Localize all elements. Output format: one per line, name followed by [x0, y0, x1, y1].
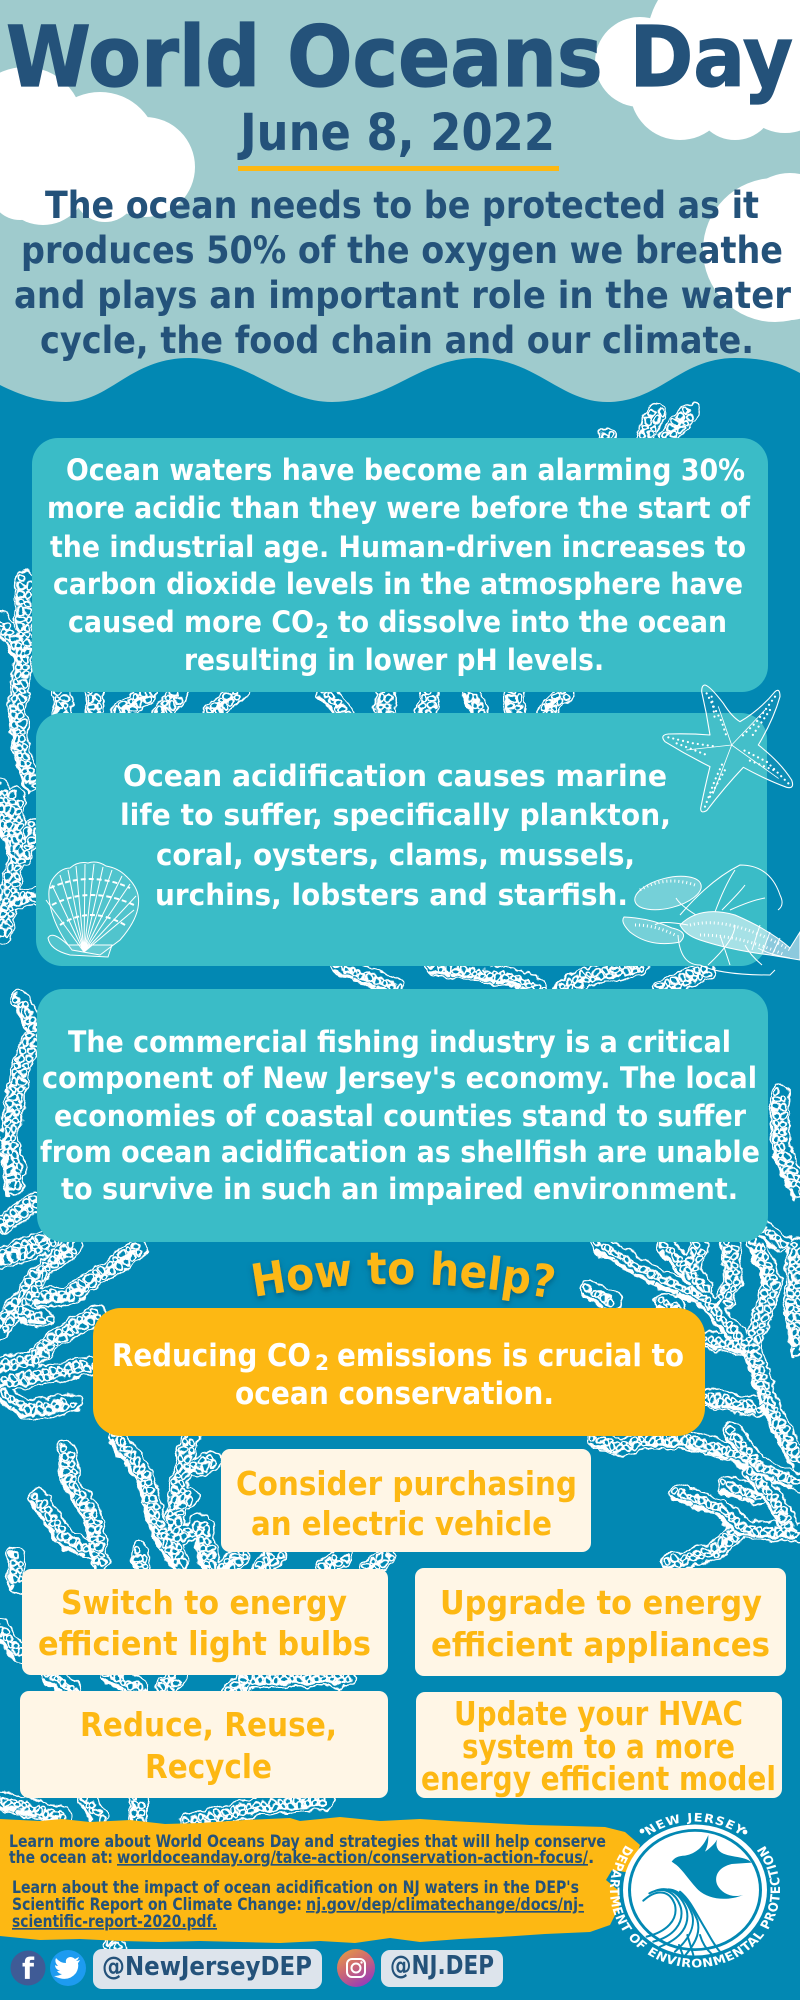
footer text	[9, 1832, 606, 1931]
card: light bulbs	[22, 1569, 388, 1675]
logo: NJ DEP seal: DEPARTMENT OF ENVIRONMENTAL PROTECTION	[610, 1846, 780, 1968]
card: reduce reuse recycle: Reduce, Reuse,	[80, 1705, 337, 1744]
panel: fishing economy	[37, 989, 768, 1242]
social handle: NJ.DEP: @NJ.DEP	[390, 1951, 494, 1981]
heading: how to help: How to help?	[250, 1250, 556, 1306]
footer text: scientific-report-2020.pdf.	[12, 1912, 217, 1931]
panel: marine life: Ocean acidification causes marine	[123, 759, 667, 793]
panel: marine life: life to suffer, specifically plankton,	[120, 798, 671, 832]
card: HVAC: system to a more	[462, 1727, 735, 1766]
panel: marine life	[36, 713, 767, 966]
card: reduce reuse recycle	[20, 1691, 388, 1798]
panel: acidity	[32, 438, 768, 692]
card: appliances	[415, 1568, 786, 1676]
footer text: Scientific Report on Climate Change:	[12, 1895, 302, 1914]
icon: instagram	[337, 1949, 375, 1987]
icon: facebook	[10, 1950, 46, 1986]
footer text: .	[588, 1848, 594, 1867]
logo: NJ DEP seal: NEW JERSEY	[644, 1812, 746, 1835]
icon: seashell	[46, 862, 139, 957]
card: light bulbs: efficient light bulbs	[38, 1624, 371, 1663]
panel: fishing economy: component of New Jersey's economy. The local	[42, 1061, 757, 1095]
social handle: NewJerseyDEP	[93, 1949, 322, 1989]
card: electric vehicle	[221, 1449, 591, 1552]
icon: facebook: f	[22, 1952, 34, 1986]
card: electric vehicle: Consider purchasing	[236, 1464, 577, 1503]
date with underline: June 8, 2022	[237, 104, 555, 163]
panel: fishing economy: to survive in such an impaired environment.	[61, 1172, 738, 1206]
sky background	[0, 0, 800, 440]
panel: fishing economy: economies of coastal counties stand to suffer	[54, 1099, 746, 1133]
panel: acidity: to dissolve into the ocean	[338, 605, 727, 639]
panel: acidity: caused more CO	[68, 605, 314, 639]
icon: lobster	[623, 865, 800, 975]
panel: acidity: Ocean waters have become an alarming 30%	[66, 453, 745, 487]
panel: fishing economy: The commercial fishing industry is a critical	[68, 1025, 731, 1059]
card: appliances: efficient appliances	[431, 1625, 770, 1664]
card: light bulbs: Switch to energy	[61, 1583, 347, 1622]
panel: acidity: resulting in lower pH levels.	[184, 643, 604, 677]
icon: starfish	[663, 685, 793, 812]
panel: reducing CO2: emissions is crucial to	[337, 1338, 684, 1374]
icon: twitter	[50, 1950, 86, 1986]
panel: marine life: urchins, lobsters and starfish.	[155, 878, 628, 912]
social handle: NewJerseyDEP: @NewJerseyDEP	[102, 1952, 312, 1982]
panel: acidity: 2	[315, 619, 329, 643]
panel: acidity: carbon dioxide levels in the atmosphere have	[53, 567, 743, 601]
footer text: nj.gov/dep/climatechange/docs/nj-	[306, 1895, 584, 1914]
panel: acidity: the industrial age. Human-driven increases to	[50, 530, 746, 564]
footer text: Learn more about World Oceans Day and strategies that will help conserve	[9, 1832, 606, 1851]
footer text: the ocean at:	[9, 1848, 113, 1867]
card: electric vehicle: an electric vehicle	[251, 1504, 552, 1543]
card: reduce reuse recycle: Recycle	[145, 1747, 272, 1786]
social handle: NJ.DEP	[381, 1950, 503, 1987]
panel: reducing CO2: Reducing CO	[112, 1338, 311, 1374]
card: HVAC: Update your HVAC	[454, 1694, 743, 1733]
panel: marine life: coral, oysters, clams, mussels,	[156, 838, 635, 872]
footer text: worldoceanday.org/take-action/conservation-action-focus/	[117, 1848, 589, 1867]
clouds	[0, 0, 800, 322]
card: HVAC	[416, 1692, 782, 1798]
panel: acidity: more acidic than they were before the start of	[47, 491, 751, 525]
coral background	[0, 406, 800, 1955]
panel: reducing CO2	[93, 1308, 705, 1436]
panel: reducing CO2: 2	[315, 1351, 329, 1375]
panel: reducing CO2: ocean conservation.	[235, 1376, 554, 1412]
footer torn banner	[0, 1817, 640, 1943]
intro text	[14, 184, 792, 362]
card: appliances: Upgrade to energy	[440, 1583, 762, 1622]
footer text: Learn about the impact of ocean acidification on NJ waters in the DEP's	[12, 1878, 579, 1897]
